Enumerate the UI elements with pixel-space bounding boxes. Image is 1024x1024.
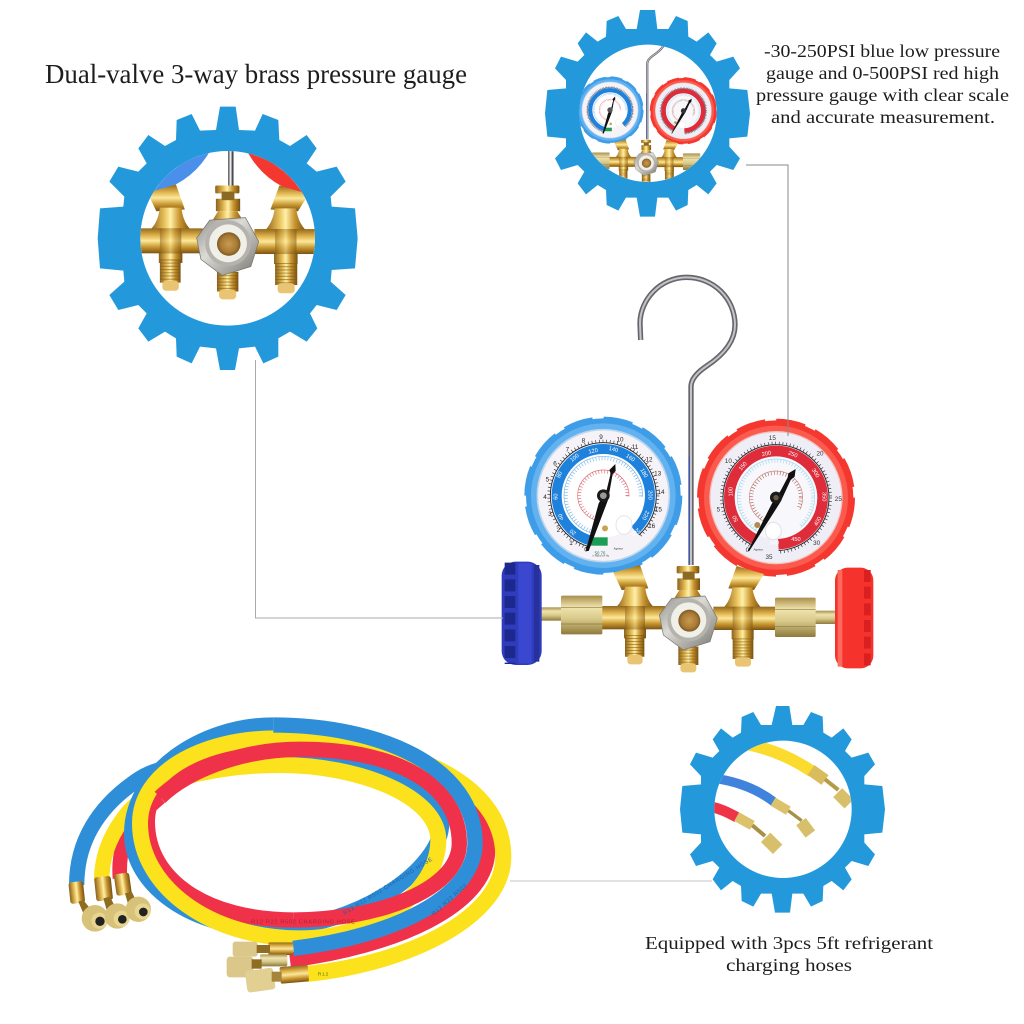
red gauge xyxy=(699,420,853,575)
blue gauge band numbers xyxy=(554,446,652,537)
blue gauge band numbers: 40 xyxy=(558,513,566,521)
right hose fittings xyxy=(227,942,309,993)
text block: hoses description xyxy=(645,933,933,975)
blue gauge outer scale numbers: 15 xyxy=(655,506,662,513)
blue gauge outer scale numbers: Agrisur xyxy=(614,546,623,550)
connector line: hoses to lower gear xyxy=(510,880,712,882)
text block: gauge description: pressure gauge with clear scale xyxy=(756,85,1009,105)
yellow hose end xyxy=(747,744,849,804)
gear shape xyxy=(680,706,885,913)
blue gauge band numbers: 120 xyxy=(588,448,599,456)
gear icon: hose ends close-up xyxy=(680,706,885,913)
yellow hose left end xyxy=(102,773,200,880)
red gauge outer scale numbers: 25 xyxy=(835,496,842,503)
blue gauge band numbers: 140 xyxy=(608,446,619,454)
red gauge face xyxy=(699,420,853,575)
red gauge band numbers: 200 xyxy=(761,450,772,458)
red gauge outer scale numbers: 20 xyxy=(816,450,824,457)
blue gauge band numbers: 160 xyxy=(624,453,636,463)
gear shape xyxy=(98,107,358,370)
blue gauge xyxy=(526,418,681,573)
blue gauge outer scale numbers: 16 xyxy=(648,523,656,530)
red gauge band numbers: 350 xyxy=(820,492,826,501)
blue gauge outer scale numbers: 7 xyxy=(566,446,570,453)
brass manifold xyxy=(561,565,816,672)
blue gauge needle xyxy=(586,464,616,551)
blue hose inner lap xyxy=(77,725,442,928)
red hose second lap xyxy=(147,738,488,960)
red gauge outer scale numbers xyxy=(717,435,842,561)
blue gauge outer scale numbers: 6 xyxy=(553,460,557,467)
blue valve knob xyxy=(502,562,563,665)
red gauge band numbers: 450 xyxy=(791,537,801,543)
blue gauge outer scale numbers: 4 xyxy=(543,494,547,501)
blue gauge band numbers: 200 xyxy=(646,490,652,500)
panel: main manifold gauge set xyxy=(502,277,873,672)
text block: hoses description: charging hoses xyxy=(726,955,852,975)
connector line: left gear to manifold xyxy=(256,360,503,618)
red hose end xyxy=(710,807,778,849)
hook xyxy=(640,277,735,565)
red gauge outer scale numbers: 35 xyxy=(765,554,773,561)
text block: gauge description: gauge and 0-500PSI red high xyxy=(766,63,999,83)
hose print text: R12 R22 R502 CHARGING HOSE xyxy=(342,856,434,917)
red gauge band numbers: 500 xyxy=(770,540,779,546)
red hose main lap xyxy=(160,749,459,920)
blue gauge outer scale numbers: 10 xyxy=(616,436,624,443)
blue gauge outer scale numbers: 13 xyxy=(654,470,662,477)
gear icon: gauges close-up xyxy=(545,10,750,217)
coiled refrigerant hoses xyxy=(68,725,503,993)
enlarged manifold photo xyxy=(140,151,315,300)
blue gauge outer scale numbers: 5 xyxy=(546,476,550,483)
blue gauge outer scale numbers: 2 xyxy=(557,527,561,534)
blue gauge band numbers: 180 xyxy=(638,468,648,479)
text block: gauge description xyxy=(756,41,1009,127)
red gauge outer scale numbers: 0 xyxy=(746,547,750,554)
blue gauge band numbers: 240 xyxy=(629,526,641,537)
blue gauge band numbers: 80 xyxy=(556,471,564,479)
hose print text: R12 xyxy=(318,971,329,977)
blue gauge band numbers: 220 xyxy=(640,509,650,521)
red gauge outer scale numbers: 15 xyxy=(769,435,776,442)
blue gauge outer scale numbers: 8 xyxy=(582,437,586,444)
red gauge band numbers: 50 xyxy=(732,514,740,522)
blue hose end xyxy=(715,778,810,834)
red gauge band numbers: 100 xyxy=(729,487,735,496)
left hose fittings xyxy=(68,872,151,932)
red gauge outer scale numbers: Agrisur xyxy=(754,547,763,551)
hose print text: R12 R22 R502 CHARGING HOSE xyxy=(251,920,356,926)
red gauge band numbers: 250 xyxy=(787,450,798,460)
blue gauge outer scale numbers: 1 xyxy=(569,540,573,547)
blue gauge band numbers: 20 xyxy=(569,527,578,536)
miniature gauge photo xyxy=(579,46,717,182)
connector line: top gear to red gauge xyxy=(746,165,788,436)
red gauge outer scale numbers: 10 xyxy=(725,458,732,465)
red hose left end xyxy=(120,797,160,878)
blue gauge band numbers: 60 xyxy=(554,494,560,500)
gear shape xyxy=(545,10,750,217)
blue gauge outer scale numbers: in Hg/psi cm Hg xyxy=(592,556,610,558)
yellow hose xyxy=(140,738,503,974)
red gauge outer scale numbers: 30 xyxy=(813,540,821,547)
red gauge band numbers xyxy=(729,450,826,546)
blue gauge outer scale numbers: 12 xyxy=(645,456,653,463)
title: Dual-valve 3-way brass pressure gauge xyxy=(45,59,467,89)
red gauge band numbers: 300 xyxy=(810,468,820,479)
text block: gauge description: -30-250PSI blue low pressure xyxy=(764,41,1000,61)
blue gauge outer scale numbers: 9 xyxy=(599,434,603,441)
text block: gauge description: and accurate measurement. xyxy=(771,107,995,127)
hose print text xyxy=(251,856,469,977)
gear icon: brass manifold close-up xyxy=(98,106,358,370)
red valve knob xyxy=(815,568,873,668)
blue gauge outer scale numbers: 11 xyxy=(632,444,639,451)
blue gauge outer scale numbers: 50 76 xyxy=(595,550,606,555)
three hose ends xyxy=(710,744,849,849)
blue hose outer lap xyxy=(273,725,475,948)
red gauge band numbers: 400 xyxy=(813,516,823,527)
blue gauge outer scale numbers: 3 xyxy=(548,511,552,518)
text block: hoses description: Equipped with 3pcs 5ft refrigerant xyxy=(645,933,933,953)
blue gauge outer scale numbers: 0 xyxy=(584,546,588,553)
red gauge band numbers: 150 xyxy=(738,461,749,472)
red gauge outer scale numbers: 5 xyxy=(717,506,721,513)
blue gauge band numbers: 100 xyxy=(569,453,581,464)
red gauge needle xyxy=(748,469,796,551)
blue gauge outer scale numbers: 14 xyxy=(657,489,665,496)
blue gauge outer scale numbers xyxy=(543,434,665,558)
hose print text: R12 R22 R502 xyxy=(431,883,469,917)
blue gauge face xyxy=(526,418,681,573)
